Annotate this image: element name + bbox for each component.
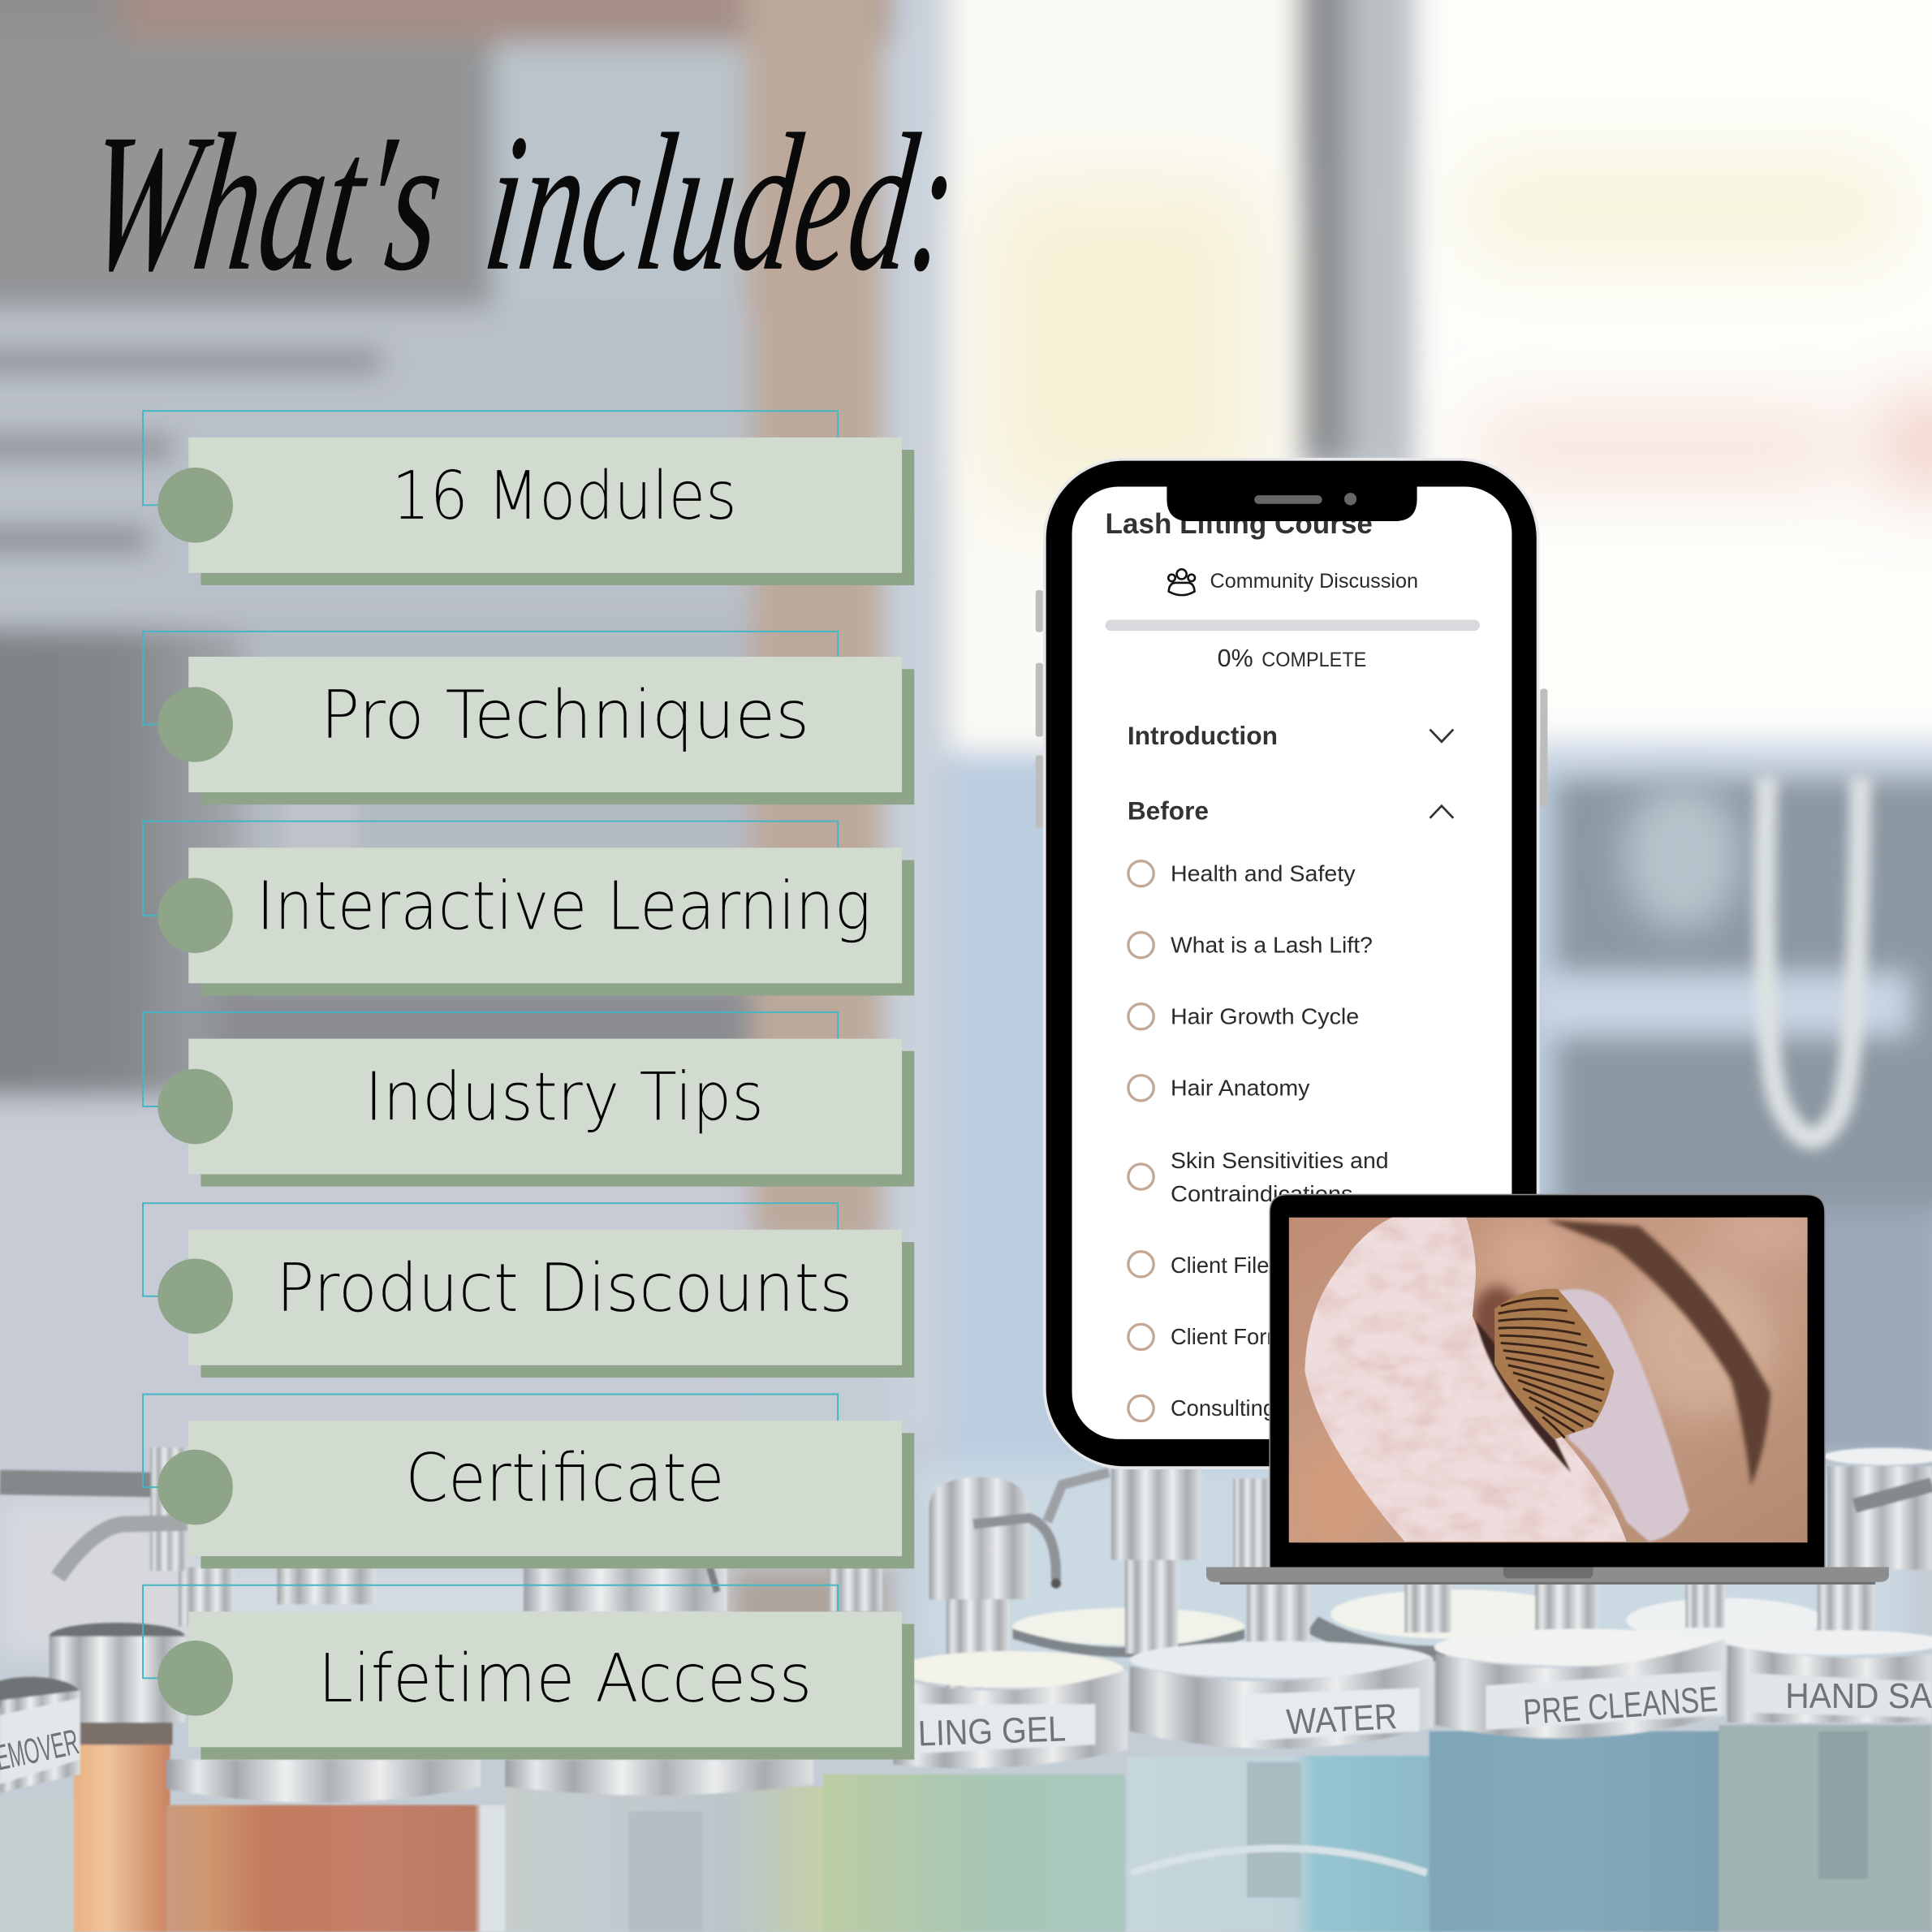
item: Pro Techniques (143, 632, 914, 804)
course title: Lash Lifting Course (1106, 508, 1373, 540)
laptop mockup (1206, 1195, 1889, 1585)
item: Lifetime Access (143, 1585, 914, 1760)
chevron down (1430, 730, 1453, 742)
lesson: Health and Safety: Health and Safety (1171, 860, 1356, 886)
liquid: gray green (1719, 1725, 1932, 1932)
background: bottles with pump dispensers (0, 1447, 1932, 1932)
liquid: orange left (74, 1744, 170, 1932)
community discussion label: Community Discussion (1210, 570, 1418, 593)
progress bar (1106, 619, 1480, 631)
item: Product Discounts (143, 1203, 914, 1378)
lesson: Consulting: Consulting (1171, 1395, 1275, 1421)
item: Interactive Learning: Interactive Learning (257, 868, 871, 945)
community discussion icon (1168, 569, 1195, 595)
lesson: Skin Sensitivities and Contraindications: Contraindications (1171, 1181, 1353, 1206)
lesson: Skin Sensitivities and Contraindications (1128, 1148, 1389, 1206)
item: Certificate: Certificate (405, 1440, 724, 1517)
bottle label: water: WATER (1285, 1697, 1398, 1742)
silicone shield (1558, 1289, 1689, 1542)
eyebrow (1546, 1220, 1770, 1486)
liquid: clear bottle (505, 1787, 823, 1932)
lesson: Client Forms: Client Forms (1171, 1324, 1296, 1349)
pump heads (929, 1477, 1029, 1599)
item: Pro Techniques: Pro Techniques (321, 677, 809, 754)
item: Industry Tips (143, 1012, 914, 1187)
liquid: pale green (823, 1775, 1125, 1932)
liquid: red orange (166, 1805, 505, 1932)
title: included: (475, 94, 968, 313)
under-eye pad (1305, 1218, 1627, 1542)
item: Product Discounts: Product Discounts (276, 1250, 852, 1327)
item: Industry Tips: Industry Tips (364, 1059, 764, 1136)
glass: emover (0, 1799, 74, 1932)
section: Before: Before (1128, 796, 1209, 825)
collars (897, 1651, 1123, 1688)
item: Certificate (143, 1394, 914, 1568)
lesson: Client Files (1128, 1252, 1280, 1278)
title (76, 94, 968, 313)
laptop screen: lash lift photo (1287, 1215, 1818, 1559)
phone mockup (1036, 458, 1547, 1469)
pump stems (947, 1589, 1009, 1688)
notch (1167, 487, 1417, 521)
dip tubes (1247, 1762, 1301, 1898)
bottle labels (919, 1704, 1095, 1753)
lesson: Skin Sensitivities and Contraindications: Skin Sensitivities and (1171, 1148, 1389, 1173)
laptop hinge notch (1503, 1568, 1593, 1578)
title: What's (76, 94, 454, 313)
speaker (1254, 495, 1322, 504)
chevron up (1430, 806, 1453, 818)
back caps (1013, 1608, 1244, 1645)
lashes (1476, 1321, 1571, 1473)
complete label: COMPLETE (1261, 649, 1366, 671)
camera (1344, 493, 1356, 505)
lesson: Hair Growth Cycle: Hair Growth Cycle (1171, 1003, 1359, 1029)
progress percentage: 0% (1218, 645, 1253, 672)
lesson: Hair Anatomy: Hair Anatomy (1171, 1075, 1310, 1100)
laptop base (1220, 1577, 1875, 1585)
bottle label: pre cleanse: PRE CLEANSE (1522, 1680, 1719, 1732)
item: Lifetime Access: Lifetime Access (318, 1641, 812, 1718)
lesson: What is a Lash Lift?: What is a Lash Lift? (1171, 932, 1373, 957)
liquid: blue (1430, 1731, 1725, 1932)
item: 16 Modules: 16 Modules (392, 458, 737, 535)
item: Interactive Learning (143, 822, 914, 995)
section: Introduction: Introduction (1128, 721, 1278, 750)
item: 16 Modules (143, 411, 914, 585)
bottle label: peeling gel: LING GEL (917, 1709, 1067, 1754)
lesson: Client Files: Client Files (1171, 1253, 1280, 1278)
liquid: water (1128, 1756, 1430, 1932)
